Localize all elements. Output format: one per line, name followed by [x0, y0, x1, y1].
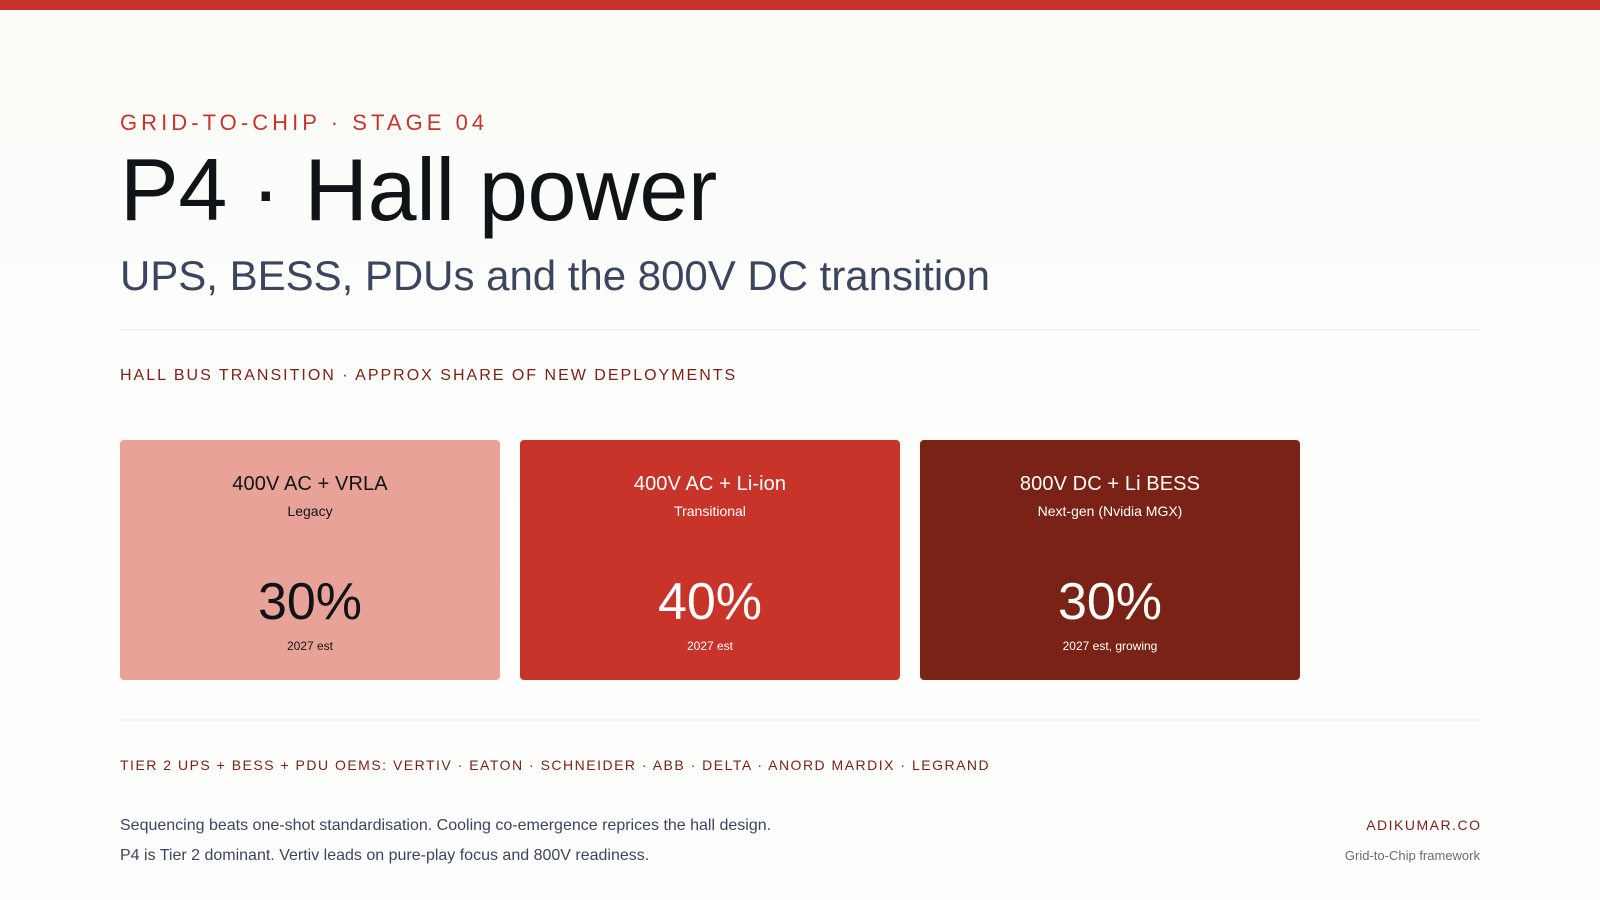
- share figure: 40%: [658, 573, 762, 631]
- card heading: 400V AC + Li-ion: [634, 473, 786, 495]
- card footnote: 2027 est, growing: [1063, 639, 1157, 653]
- top bar: [0, 0, 1600, 10]
- takeaway text: [120, 817, 771, 864]
- framework label: Grid-to-Chip framework: [1345, 848, 1480, 863]
- card subheading: Next-gen (Nvidia MGX): [1038, 503, 1182, 519]
- takeaway text: Sequencing beats one-shot standardisation. Cooling co-emergence reprices the hall design.: [120, 817, 771, 834]
- card heading: 800V DC + Li BESS: [1020, 473, 1200, 495]
- card footnote: 2027 est: [687, 639, 733, 653]
- eyebrow: GRID-TO-CHIP · STAGE 04: [120, 110, 488, 135]
- panel: 400V AC + Li-ion: [520, 440, 900, 680]
- title: P4 · Hall power: [120, 140, 717, 239]
- section heading: HALL BUS TRANSITION · APPROX SHARE OF NEW DEPLOYMENTS: [120, 367, 737, 384]
- OEM list: TIER 2 UPS + BESS + PDU OEMS: VERTIV · EATON · SCHNEIDER · ABB · DELTA · ANORD MARDIX · LEGRAND: [120, 757, 990, 773]
- card subheading: Transitional: [674, 503, 746, 519]
- share figure: 30%: [258, 573, 362, 631]
- takeaway text: P4 is Tier 2 dominant. Vertiv leads on pure-play focus and 800V readiness.: [120, 847, 649, 864]
- card heading: 400V AC + VRLA: [232, 473, 388, 495]
- card subheading: Legacy: [287, 503, 333, 519]
- panel: 400V AC + VRLA: [120, 440, 500, 680]
- brand: ADIKUMAR.CO: [1366, 817, 1482, 833]
- panel: 800V DC + Li BESS: [920, 440, 1300, 680]
- subtitle: UPS, BESS, PDUs and the 800V DC transition: [120, 252, 990, 299]
- card footnote: 2027 est: [287, 639, 333, 653]
- share figure: 30%: [1058, 573, 1162, 631]
